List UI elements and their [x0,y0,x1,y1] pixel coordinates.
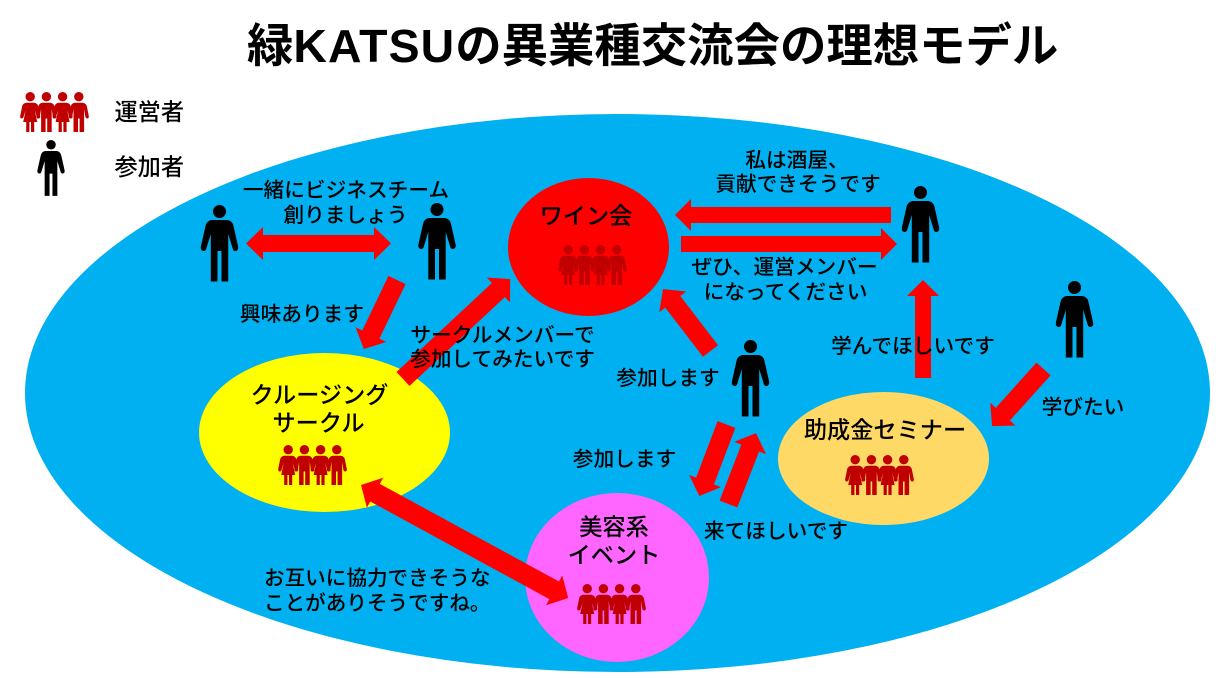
text: wine shop contribution: 貢献できそうです [715,173,881,196]
icon: cruising organizers [278,445,347,485]
legend: participant label: 参加者 [114,154,184,180]
icon: beauty organizers [577,584,646,624]
arrow: participant to wine [650,279,724,361]
legend: participant icon [37,140,65,196]
beauty heading: 美容系 [579,514,649,540]
text: please come: 来てほしいです [704,520,848,543]
arrow: seminar to top right participant [907,280,939,378]
text: please become member [691,256,878,304]
icon: participant far right [1056,281,1093,358]
icon: wine party organizers [558,245,627,285]
text: wine shop contribution [715,149,881,196]
text: build a business team [243,179,449,227]
legend: organizer label: 運営者 [114,99,184,125]
text: cooperate with each other: ことがありそうですね。 [264,592,491,615]
legend: organizer icon [20,92,89,132]
arrow: team building double [246,227,391,260]
seminar heading: 助成金セミナー [804,417,966,443]
arrow: learner to seminar [979,358,1056,437]
icon: participant second [418,203,456,280]
panel: wine party circle [508,178,669,316]
arrow: wine invites participant [681,228,897,260]
text: cooperate with each other: お互いに協力できそうな [264,567,491,590]
cruising heading: クルージング [251,382,388,408]
icon: participant center [732,340,769,416]
panel: subsidy seminar circle [778,392,989,525]
text: want to join circle: サークルメンバーで [410,324,595,347]
icon: participant left [201,205,238,282]
arrow: cruising and beauty double [353,470,576,613]
text: joining wine: 参加します [616,367,720,390]
text: want you to learn: 学んでほしいです [831,335,995,358]
title: 緑KATSUの異業種交流会の理想モデル [247,20,1058,72]
panel: beauty event circle [525,493,709,662]
text: wine shop contribution: 私は酒屋、 [745,149,849,172]
text: want to join circle [410,324,595,371]
text: joining beauty event: 参加します [573,448,676,471]
cruising heading line 2: サークル [272,410,365,436]
text: interested: 興味あります [240,303,364,326]
beauty heading line 2: イベント [568,542,660,568]
arrow: interest to cruising [349,273,412,356]
wine party heading: ワイン会 [540,203,632,229]
arrow: participant offers to wine [675,199,891,231]
icon: seminar organizers [845,455,914,495]
text: want to learn: 学びたい [1042,396,1124,419]
arrow: cruising to wine [391,267,522,391]
text: cooperate with each other [264,567,491,615]
icon: participant top right [902,186,939,262]
text: build a business team: 創りましょう [283,204,408,227]
panel: cruising circle [199,353,450,512]
arrow: participant to beauty event [683,418,742,502]
arrow: beauty event to participant [713,427,772,510]
text: please become member: になってください [704,281,867,304]
text: want to join circle: 参加してみたいです [410,348,595,371]
text: build a business team: 一緒にビジネスチーム [243,179,449,202]
text: please become member: ぜひ、運営メンバー [691,256,878,279]
